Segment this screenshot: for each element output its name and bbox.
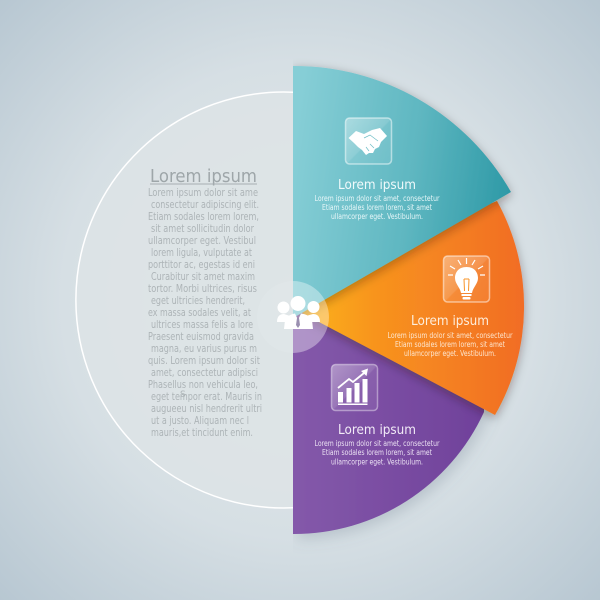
text block: teal segment: ullamcorper eget. Vestibulum. xyxy=(331,212,423,221)
text block: left panel: ultrices massa felis a lore xyxy=(151,320,253,331)
text block: left panel: eget tempor erat. Mauris in xyxy=(151,392,262,403)
text block: left panel: tortor. Morbi ultrices, risus xyxy=(148,284,257,295)
heading: left panel: Lorem ipsum xyxy=(150,166,257,187)
text block: left panel: quis. Lorem ipsum dolor sit xyxy=(148,356,260,367)
icon: handshake xyxy=(346,118,392,164)
text block: left panel xyxy=(148,188,262,439)
text block: left panel: amet, consectetur adipisci xyxy=(151,368,258,379)
text block: orange segment: Etiam sodales lorem lorem, sit amet xyxy=(395,340,505,349)
text block: left panel: porttitor ac, egestas id eni xyxy=(148,260,255,271)
text block: orange segment xyxy=(388,331,513,358)
hub: translucent circle with people icon xyxy=(257,281,329,353)
icon: light bulb xyxy=(444,256,490,302)
icon: team xyxy=(277,296,320,329)
text block: left panel: sit amet sollicitudin dolor xyxy=(151,224,255,235)
text block: left panel: augueeu nisl hendrerit ultri xyxy=(151,404,262,415)
text block: left panel: Praesent euismod gravida xyxy=(148,332,254,343)
heading: teal segment: Lorem ipsum xyxy=(338,177,416,193)
text block: left panel: eget ultricies hendrerit, xyxy=(151,296,245,307)
text block: teal segment: Etiam sodales lorem lorem, sit amet xyxy=(322,203,432,212)
text block: left panel: ut a justo. Aliquam nec l xyxy=(151,416,249,427)
text block: purple segment: Etiam sodales lorem lorem, sit amet xyxy=(322,448,432,457)
heading: purple segment: Lorem ipsum xyxy=(338,422,416,438)
text block: left panel: Etiam sodales lorem lorem, xyxy=(148,212,259,223)
text block: teal segment: Lorem ipsum dolor sit amet, consectetur xyxy=(314,194,440,203)
text block: left panel: lorem ligula, vulputate at xyxy=(151,248,252,259)
text block: teal segment xyxy=(314,194,440,221)
panel: teal segment xyxy=(293,66,511,318)
text block: purple segment xyxy=(314,439,440,466)
text block: left panel: Phasellus non vehicula leo, xyxy=(148,380,258,391)
text block: orange segment: ullamcorper eget. Vestibulum. xyxy=(404,349,496,358)
text block: left panel: mauris,et tincidunt enim. xyxy=(151,428,253,439)
text block: left panel: magna, eu varius purus m xyxy=(151,344,257,355)
text block: left panel: ullamcorper eget. Vestibul xyxy=(148,236,256,247)
panel: purple segment xyxy=(293,290,484,534)
text block: left panel: Lorem ipsum dolor sit ame xyxy=(148,188,258,199)
text block: purple segment: ullamcorper eget. Vestibulum. xyxy=(331,458,423,466)
text block: orange segment: Lorem ipsum dolor sit amet, consectetur xyxy=(388,331,513,340)
heading: orange segment: Lorem ipsum xyxy=(411,313,489,329)
panel: orange segment xyxy=(302,201,524,415)
text block: left panel: ex massa sodales velit, at xyxy=(148,308,251,319)
text block: left panel: consectetur adipiscing elit. xyxy=(151,200,259,211)
text block: left panel: Curabitur sit amet maxim xyxy=(151,272,255,283)
icon: growth chart xyxy=(332,364,378,410)
text block: left panel: S xyxy=(180,390,186,400)
panel: left translucent half circle xyxy=(76,92,293,508)
text block: purple segment: Lorem ipsum dolor sit amet, consectetur xyxy=(314,439,440,448)
